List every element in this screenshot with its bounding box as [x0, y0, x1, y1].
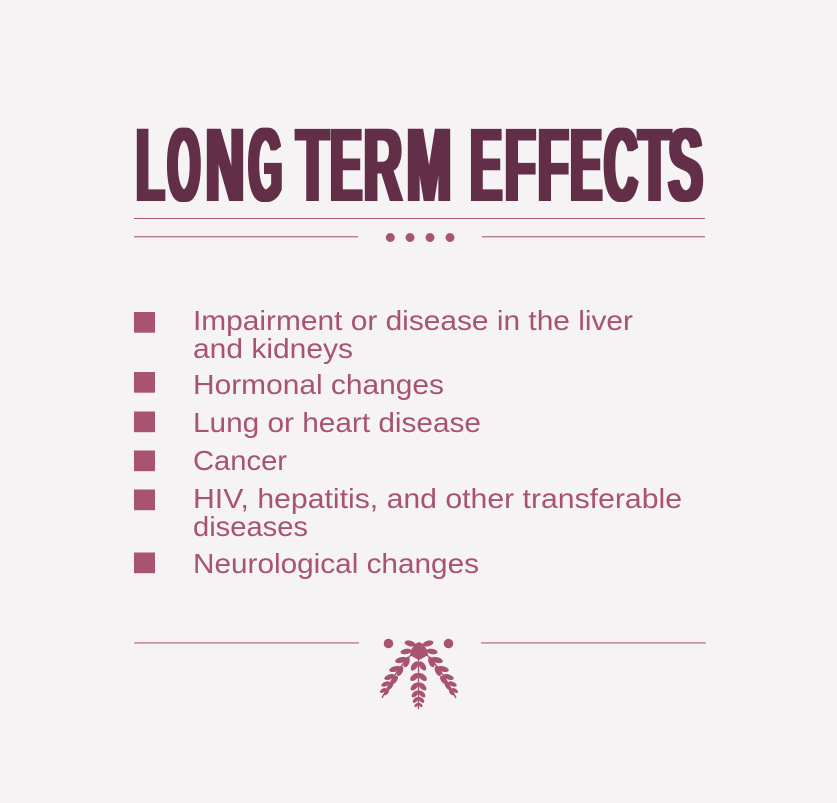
title [136, 107, 703, 224]
title: R [364, 107, 402, 224]
title: T [638, 107, 671, 224]
list item: cancer: Cancer [193, 445, 287, 476]
list item: HIV, hepatitis [134, 483, 682, 542]
title: E [470, 107, 502, 224]
list item: liver and kidneys: Impairment or disease in the liver [193, 305, 633, 336]
list item: liver and kidneys [134, 305, 633, 364]
title: E [330, 107, 362, 224]
list item: liver and kidneys: and kidneys [193, 333, 353, 364]
title: C [604, 107, 637, 224]
right branch [426, 648, 459, 698]
title: O [168, 107, 200, 224]
list item: HIV, hepatitis: HIV, hepatitis, and other transferable [193, 483, 682, 514]
list item: lung or heart disease: Lung or heart disease [193, 407, 481, 438]
list item: HIV, hepatitis: diseases [193, 511, 308, 542]
title: G [249, 107, 282, 224]
center branch [409, 658, 428, 709]
icon: floral ornament [379, 639, 459, 709]
header divider [134, 218, 705, 242]
title: F [505, 107, 536, 224]
bullet list [134, 305, 682, 579]
title: F [538, 107, 568, 224]
title: T [296, 107, 329, 224]
title: E [570, 107, 602, 224]
list item: cancer [134, 445, 287, 476]
text: S [668, 107, 703, 224]
list item: hormonal changes: Hormonal changes [193, 369, 444, 400]
footer divider lines [134, 642, 706, 644]
title: N [206, 107, 244, 224]
list item: neurological changes: Neurological changes [193, 548, 479, 579]
left branch [379, 648, 412, 698]
title: L [136, 107, 164, 224]
title: M [407, 107, 451, 224]
